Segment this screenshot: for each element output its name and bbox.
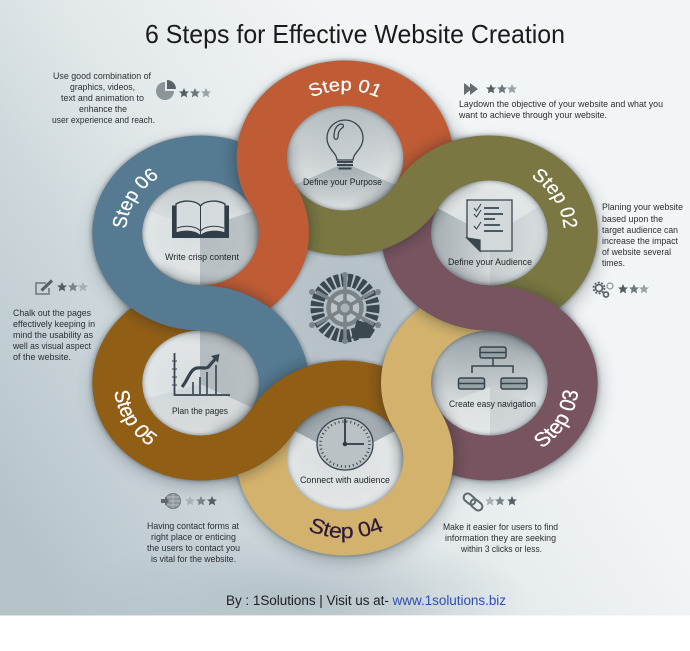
panel: step 1 hole	[285, 104, 405, 215]
label: create easy navigation: Create easy navigation	[449, 399, 536, 409]
panel: step 3 hole	[434, 330, 548, 436]
text block: left note: effectively keeping in	[13, 319, 95, 329]
text block: right note: of website several	[602, 247, 671, 257]
text block: right note: increase the impact	[602, 236, 678, 246]
step labels on ribbons: Step 01	[309, 80, 380, 98]
icon: growth chart	[172, 353, 230, 395]
step labels on ribbons: Step 02	[532, 169, 578, 228]
rim shadow around ribbons	[56, 83, 634, 533]
text block: bottom right note	[443, 522, 558, 554]
step labels on ribbons: Step 04	[310, 518, 383, 542]
step labels on ribbons: Step 05	[114, 390, 158, 444]
text block: left note: mind the usability as	[13, 330, 93, 340]
title: 6 Steps for Effective Website Creation	[145, 19, 565, 49]
step labels on ribbons: Step 06	[112, 168, 158, 228]
icon: pencil box with stars	[36, 280, 88, 294]
icon: light bulb	[327, 120, 363, 168]
label: plan the pages: Plan the pages	[172, 406, 228, 416]
ribbons: base layer	[56, 83, 634, 533]
icon: pie chart with stars	[156, 80, 211, 100]
text block: right note: times.	[602, 258, 625, 268]
panel: step 5 hole	[140, 329, 262, 437]
text block: step 1 note top left: Use good combination of	[53, 71, 151, 81]
text block: step 1 note top left	[52, 71, 155, 125]
text block: step 1 note top left: enhance the	[79, 104, 127, 114]
text block: bottom left note: Having contact forms at	[147, 521, 239, 531]
icon: open book	[172, 201, 229, 238]
text block: bottom right note: information they are seeking	[445, 533, 556, 543]
icon: globe with stars	[161, 494, 217, 508]
label: define your audience: Define your Audience	[448, 257, 532, 267]
text block: right note: based upon the	[602, 214, 663, 224]
text block: top right note	[458, 99, 663, 120]
icon: sitemap	[458, 347, 527, 389]
text block: bottom left note: right place or enticing	[151, 532, 236, 542]
centre backdrop	[263, 230, 427, 386]
panel: step 2 hole	[429, 179, 550, 290]
text block: bottom left note	[147, 521, 240, 564]
text block: left note: of the website.	[13, 352, 71, 362]
text block: bottom left note: the users to contact you	[147, 543, 240, 553]
text block: top right note: want to achieve through your website.	[458, 110, 607, 120]
text block: bottom right note: within 3 clicks or less.	[460, 544, 542, 554]
panel: step 6 hole	[140, 179, 262, 290]
step labels on ribbons: Step 03	[534, 390, 578, 446]
icon: central ship wheel	[309, 272, 381, 344]
icon: clock	[317, 418, 373, 470]
text block: bottom left note: is vital for the website.	[151, 554, 236, 564]
text block: left note	[12, 308, 95, 362]
label: connect with audience: Connect with audience	[300, 475, 390, 485]
text block: right note	[602, 202, 683, 268]
text block: step 1 note top left: user experience and reach.	[52, 115, 155, 125]
panel: step 4 hole	[285, 404, 405, 512]
ribbon ring	[92, 60, 598, 556]
text block: right note: Planing your website	[602, 202, 683, 212]
icon: checklist	[467, 200, 512, 251]
text block: step 1 note top left: text and animation to	[61, 93, 144, 103]
ribbon overlap shadows	[140, 139, 550, 477]
text block: left note: Chalk out the pages	[13, 308, 91, 318]
ribbons: crossing layer	[123, 120, 567, 496]
soft shadow under ribbons	[58, 89, 636, 539]
label: define your purpose: Define your Purpose	[303, 177, 382, 187]
text block: left note: well as visual aspect	[12, 341, 91, 351]
step labels on ribbons	[112, 80, 578, 542]
label: write crisp content: Write crisp content	[165, 252, 239, 262]
footer credit: By : 1Solutions | Visit us at- www.1solutions.biz	[226, 593, 506, 608]
text block: right note: target audience can	[602, 225, 678, 235]
icon: chain link with stars	[462, 492, 517, 512]
icon: play arrows with stars	[464, 83, 517, 95]
text block: bottom right note: Make it easier for users to find	[443, 522, 558, 532]
text block: top right note: Laydown the objective of your website and what you	[459, 99, 663, 109]
text block: step 1 note top left: graphics, videos,	[70, 82, 135, 92]
icon: gears with stars	[594, 282, 649, 297]
